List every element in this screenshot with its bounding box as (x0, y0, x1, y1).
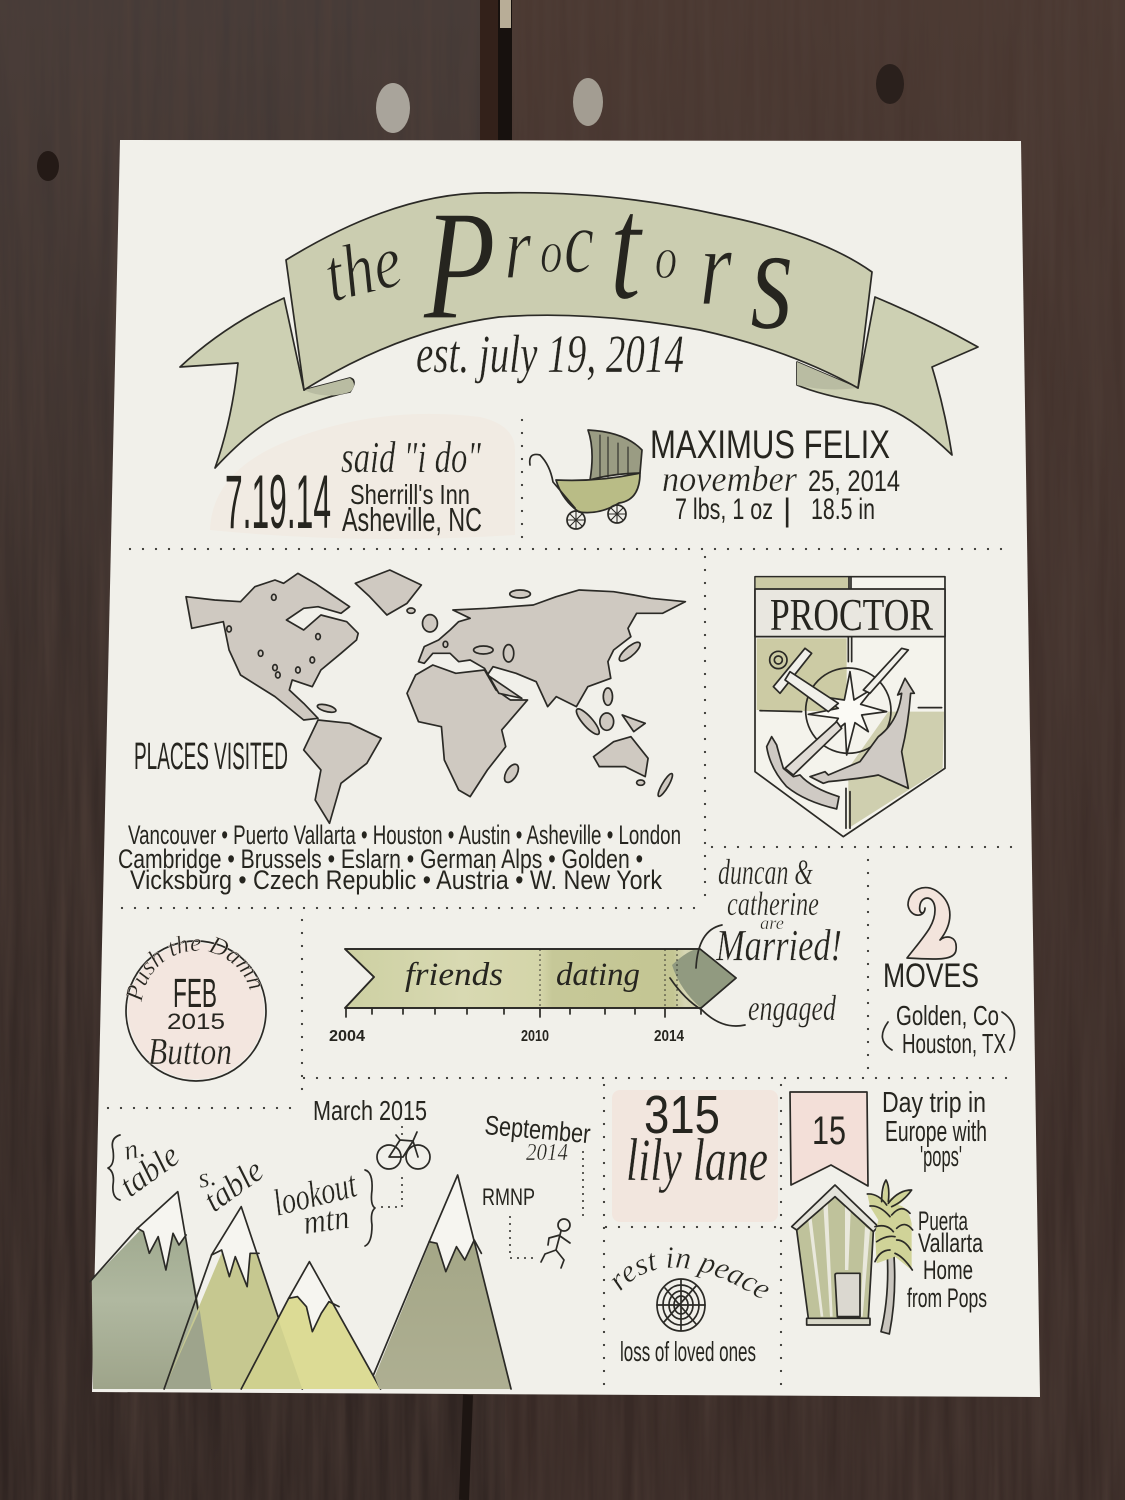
mountain labels: lookout (269, 1163, 362, 1225)
panel: moves (882, 888, 1014, 1059)
title: the Proctors: o (540, 220, 562, 286)
subtitle: est. july 19, 2014: est. july 19, 2014 (416, 324, 684, 384)
panel: 315 lily lane: lily lane (626, 1127, 768, 1193)
milestone: september 2014 runner (483, 1110, 592, 1268)
mountain labels: mtn (301, 1199, 352, 1242)
peach wash (210, 414, 515, 539)
year labels: 2014 (654, 1028, 684, 1045)
panel: rest in peace: loss of loved ones (620, 1336, 756, 1367)
badge: push the damn button: FEB (173, 970, 217, 1016)
list of visited cities: Vicksburg • Czech Republic • Austria • W. New York (130, 865, 662, 895)
callout: married: duncan & (718, 852, 813, 892)
icon: house (792, 1185, 878, 1325)
olive quadrants (756, 577, 944, 828)
milestone: march 2015 bike (313, 1095, 430, 1207)
visited place dots (227, 594, 448, 678)
anchors (767, 648, 914, 809)
badge: push the damn button: Button (148, 1031, 232, 1073)
mountain labels (108, 1132, 535, 1246)
south america (304, 720, 381, 823)
panel: 15 day trip: Day trip in (882, 1087, 986, 1119)
panel: 15 day trip (790, 1087, 987, 1186)
panel: rest in peace (612, 1247, 769, 1367)
islands (315, 590, 675, 797)
panel: puerto vallarta home: from Pops (907, 1283, 987, 1313)
panel: puerto vallarta home: Vallarta (918, 1228, 984, 1258)
panel: 315 lily lane: 315 (644, 1085, 720, 1145)
dotted dividers (108, 420, 1012, 1385)
mountain labels: table (197, 1152, 270, 1219)
icon: runner (541, 1219, 570, 1268)
panel: 15 day trip: 'pops' (920, 1141, 962, 1173)
title: the Proctors: r (505, 199, 532, 298)
callout: engaged: engaged (748, 988, 837, 1028)
mountain: north table (90, 1192, 212, 1389)
list of visited cities: Cambridge • Brussels • Eslarn • German Alps • Golden • (118, 844, 643, 874)
paper sheet (92, 140, 1040, 1397)
relationship timeline (329, 949, 736, 1045)
shield (755, 577, 945, 837)
venue: Sherrill's Inn (350, 479, 470, 510)
birth stats: | (783, 492, 791, 528)
birth date: 25, 2014 (808, 465, 900, 498)
title: the Proctors: P (423, 179, 496, 353)
panel: said I do (210, 414, 515, 545)
title: the Proctors: c (564, 193, 594, 292)
title: the Proctors: o (655, 226, 677, 292)
panel: 315 lily lane (612, 1085, 778, 1222)
married segment (672, 949, 736, 1008)
icon: bicycle (377, 1132, 430, 1169)
eurasia (418, 590, 685, 707)
location: Asheville, NC (342, 501, 482, 538)
mountain labels: table (113, 1137, 186, 1204)
panel: puerto vallarta home (792, 1180, 987, 1334)
timeline banner (345, 949, 736, 1008)
text: PLACES VISITED (134, 736, 288, 778)
panel: said I do: 7.19.14 (225, 460, 331, 545)
panel: Maximus Felix (650, 423, 900, 528)
panel: moves: MOVES (883, 957, 979, 995)
birth date (662, 459, 900, 499)
name ribbon (755, 589, 945, 637)
callout: married: catherine (727, 886, 819, 923)
name: MAXIMUS FELIX (650, 423, 890, 467)
panel: moves: Golden, Co (896, 1000, 999, 1031)
axis ticks (346, 1008, 701, 1017)
panel: 15 day trip: Europe with (885, 1116, 987, 1148)
callout: married (696, 852, 842, 970)
mountains (90, 1175, 511, 1389)
crest name: PROCTOR (770, 589, 933, 640)
year labels: 2010 (521, 1028, 549, 1045)
pennant (790, 1092, 868, 1186)
relationship timeline: dating (556, 957, 640, 993)
list of visited cities: Vancouver • Puerto Vallarta • Houston • Austin • Asheville • London (128, 820, 681, 850)
callout: married: are (760, 913, 784, 933)
year labels: 2004 (329, 1028, 365, 1045)
callout: engaged (670, 978, 837, 1028)
segment labels: friends (405, 957, 503, 993)
panel: 15 day trip: 15 (812, 1109, 846, 1153)
birth stats (675, 492, 875, 528)
list of visited cities (118, 820, 681, 895)
milestone: march 2015 bike: March 2015 (313, 1095, 427, 1126)
family crest (755, 577, 945, 837)
mountain labels: s. (195, 1161, 219, 1195)
icon: baby pram (530, 430, 642, 529)
birth date: november (662, 459, 798, 499)
mountain: RMNP (373, 1175, 511, 1389)
north america (186, 573, 358, 720)
badge: push the damn button: Push the Damn (126, 936, 260, 1002)
milestone: september 2014 runner: 2014 (526, 1140, 568, 1166)
africa (407, 665, 528, 797)
badge: push the damn button: 2015 (167, 1009, 225, 1034)
callout: married: Married! (715, 921, 842, 970)
title: the Proctors: the (316, 219, 410, 318)
mountain: south table (164, 1207, 302, 1389)
mountain: lookout (241, 1262, 381, 1389)
mountain labels: n. (121, 1132, 148, 1167)
birth stats: 7 lbs, 1 oz (675, 493, 773, 526)
panel: header banner (180, 164, 978, 468)
house caption: Puerta (918, 1206, 969, 1236)
title: the Proctors: t (610, 164, 644, 331)
panel: moves: Houston, TX (902, 1028, 1006, 1059)
banner tails and folds (180, 297, 978, 468)
title: the Proctors: s (750, 194, 794, 361)
title: the Proctors (316, 164, 794, 361)
world map (186, 570, 685, 823)
title: the Proctors: r (700, 207, 733, 329)
big numeral 2 (907, 888, 956, 959)
icon: palm tree (867, 1180, 913, 1334)
year labels (329, 1028, 684, 1045)
move arrows (882, 1012, 1014, 1050)
panel: rest in peace: rest in peace (612, 1247, 769, 1298)
pink wash (612, 1090, 778, 1222)
mountain labels: RMNP (482, 1184, 535, 1211)
panel: puerto vallarta home: Home (923, 1255, 973, 1285)
said i do: said "i do" (341, 433, 481, 482)
banner main band (286, 193, 872, 390)
greenland (355, 570, 421, 615)
icon: succulent (657, 1279, 705, 1331)
milestone: september 2014 runner: September (483, 1110, 592, 1149)
badge: push the damn button (125, 936, 267, 1082)
birth stats: 18.5 in (811, 493, 875, 526)
australia (594, 737, 648, 777)
compass (806, 668, 891, 755)
